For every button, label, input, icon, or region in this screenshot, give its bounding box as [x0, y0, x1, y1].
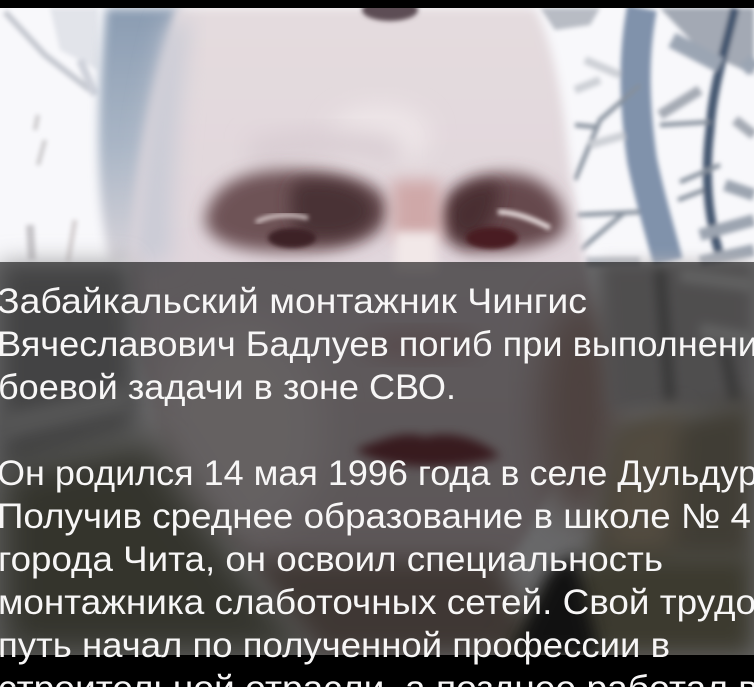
nostrils — [379, 331, 462, 357]
paragraph 2: монтажника слаботочных сетей. Свой трудо — [0, 583, 754, 622]
mouth — [355, 434, 500, 467]
left pupil — [268, 228, 316, 248]
lower face shading — [186, 402, 294, 517]
right background under panel — [600, 262, 754, 410]
paragraph 2: Он родился 14 мая 1996 года в селе Дульдур — [0, 454, 754, 493]
paragraph 1: боевой задачи в зоне СВО. — [0, 368, 456, 407]
forehead shading — [135, 20, 190, 262]
paragraph 2 — [0, 454, 754, 687]
collar shadow — [510, 555, 600, 655]
right eye highlight — [498, 212, 550, 228]
right trees — [540, 8, 754, 262]
dark translucent text panel — [0, 262, 754, 655]
left trees — [5, 8, 98, 262]
neck — [250, 560, 540, 655]
right eyebrow and eye socket — [440, 174, 565, 252]
head — [130, 8, 591, 620]
paragraph 2: Получив среднее образование в школе № 4 — [0, 497, 751, 536]
right shoulder — [590, 400, 754, 560]
top dark spot — [359, 8, 421, 24]
left background under panel — [0, 262, 135, 470]
paragraph 1 — [0, 282, 754, 407]
jacket left — [0, 440, 320, 655]
hair side — [99, 8, 180, 262]
left eyebrow and eye socket — [205, 170, 388, 252]
top black bar — [0, 0, 754, 8]
left eye highlight — [256, 215, 308, 222]
text block: article — [0, 282, 754, 687]
bottom black bar — [0, 655, 754, 687]
paragraph 2: города Чита, он освоил специальность — [0, 540, 663, 579]
nose bridge — [392, 180, 442, 240]
paragraph 2: путь начал по полученной профессии в — [0, 626, 670, 665]
paragraph 1: Вячеславович Бадлуев погиб при выполнени — [0, 325, 754, 364]
right pupil — [466, 227, 518, 249]
paragraph 1: Забайкальский монтажник Чингис — [0, 282, 587, 321]
jacket right — [500, 555, 754, 655]
